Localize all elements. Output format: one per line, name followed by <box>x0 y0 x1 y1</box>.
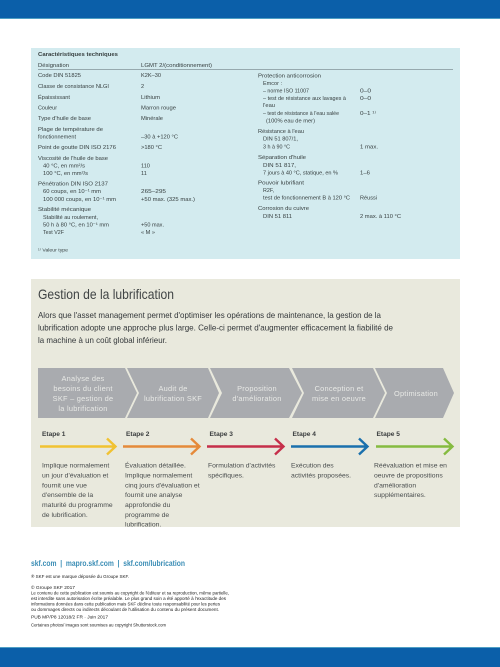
bottom blue band <box>0 647 500 667</box>
footer links: skf.com | mapro.skf.com | skf.com/lubrication <box>31 558 185 568</box>
step 2: Etape 2 <box>126 431 150 438</box>
step 2: approfondie du <box>125 502 171 509</box>
specifications right table: test de fonctionnement B à 120 °C <box>263 196 350 202</box>
specifications right table: Emcor : <box>263 81 282 87</box>
step 5: Réévaluation et mise en <box>374 462 447 470</box>
step 5: supplémentaires. <box>374 492 426 499</box>
specifications right table: 0–0 <box>360 96 371 102</box>
specifications left table: fonctionnement <box>38 134 76 140</box>
legal text: Le contenu de cette publication est soumis au copyright de l'éditeur et sa reproduction, même partielle, <box>31 590 229 596</box>
specifications left table: LGMT 2/(conditionnement) <box>141 63 212 69</box>
specifications left table: Type d'huile de base <box>38 116 91 122</box>
specifications left table: >180 °C <box>141 145 162 151</box>
specifications right table: – test de résistance à l'eau salée <box>263 111 339 117</box>
legal text: ® SKF est une marque déposée du Groupe SKF. <box>31 574 129 579</box>
step 1: Implique normalement <box>42 462 109 470</box>
specifications right table: Corrosion du cuivre <box>258 206 309 212</box>
step 1: d'ensemble de la <box>42 492 93 499</box>
step 5: d'amélioration <box>374 482 416 490</box>
specifications left table: +50 max. <box>141 222 164 228</box>
specifications right table: 1 max. <box>360 144 378 150</box>
specifications left table: « M » <box>141 230 155 236</box>
specifications left table: Épaississant <box>38 94 70 101</box>
specifications right table: – test de résistance aux lavages à <box>263 96 347 102</box>
step 3 <box>207 431 284 480</box>
step 5: Etape 5 <box>376 431 400 438</box>
step 3: Formulation d'activités <box>208 462 276 470</box>
management heading: Gestion de la lubrification <box>38 286 174 302</box>
step 2: fournit une analyse <box>125 492 183 499</box>
step 3: spécifiques. <box>208 472 244 480</box>
specifications left table: Lithium <box>141 95 160 101</box>
specifications left table: 2 <box>141 84 144 90</box>
specifications left table: K2K–30 <box>141 73 161 79</box>
chevron: design and implementation <box>292 368 385 418</box>
specifications left table: Stabilité mécanique <box>38 207 91 213</box>
specifications right table: Séparation d'huile <box>258 155 306 161</box>
chevron: client needs analysis: la lubrification <box>58 404 108 413</box>
arrow: orange <box>123 438 200 454</box>
step 2 <box>123 431 200 528</box>
specifications right table: (100% eau de mer) <box>266 118 315 124</box>
chevron: client needs analysis: besoins du client <box>53 384 113 393</box>
management introduction: la machine à un coût global inférieur. <box>38 336 167 345</box>
management introduction <box>38 311 393 345</box>
specifications left table: Test V2F <box>43 230 65 236</box>
arrow: red <box>207 438 284 454</box>
arrow: yellow <box>40 438 116 454</box>
management introduction: Alors que l'asset management permet d'optimiser les opérations de maintenance, la gestion de la <box>38 311 381 320</box>
step 1 <box>40 431 116 519</box>
specifications right table: DIN 51 811 <box>263 214 292 220</box>
chevron: improvement proposal: Proposition <box>237 384 277 393</box>
legal text: informations données dans cette publication mais SKF décline toute responsabilité pour les pertes <box>31 602 220 606</box>
specifications footnote: ¹⁾ Valeur type <box>38 248 69 252</box>
chevron: lubrication audit: lubrification SKF <box>144 394 202 403</box>
specifications right table: 2 max. à 110 °C <box>360 214 401 220</box>
specifications heading: Caractéristiques techniques <box>38 52 118 58</box>
specifications right table: 0–1 ¹⁾ <box>360 110 377 117</box>
specifications right table: 0–0 <box>360 88 371 94</box>
step 1: un jour d'évaluation et <box>42 472 108 480</box>
specifications right table: Résistance à l'eau <box>258 129 304 135</box>
chevron: client needs analysis: SKF – gestion de <box>53 394 113 403</box>
specifications right table: R2F, <box>263 188 274 194</box>
legal text <box>31 574 229 628</box>
chevron: optimisation: Optimisation <box>394 389 438 398</box>
specifications left table: 100 °C, en mm²/s <box>43 171 88 177</box>
panel: lubrication management <box>31 279 460 528</box>
specifications right table: 3 h à 90 °C <box>263 144 290 150</box>
legal text: est interdite sans autorisation écrite préalable. Le plus grand soin a été apporté à l'exactitude des <box>31 596 226 601</box>
legal text: PUB MP/P8 12018/2 FR · Juin 2017 <box>31 614 109 620</box>
specifications left table: Minérale <box>141 116 163 122</box>
specifications right table: 7 jours à 40 °C, statique, en % <box>263 170 338 176</box>
step 4: Exécution des <box>291 462 334 470</box>
step 4 <box>291 431 368 480</box>
specifications left table: 11 <box>141 171 147 177</box>
specifications right table: Réussi <box>360 196 377 202</box>
specifications left table: Code DIN 51825 <box>38 73 81 79</box>
specifications left table: 265–295 <box>141 189 166 195</box>
specifications left table <box>38 63 453 236</box>
panel: technical specifications <box>31 48 460 259</box>
legal text: Certaines photos/ images sont soumises au copyright Shutterstock.com <box>31 622 167 628</box>
step 2: programme de <box>125 512 169 519</box>
specifications left table: Classe de consistance NLGI <box>38 84 109 90</box>
specifications right table <box>258 74 401 220</box>
specifications left table: Plage de température de <box>38 127 103 133</box>
step 1: maturité du programme <box>42 502 113 509</box>
management introduction: lubrification adopte une approche plus large. Celle-ci permet d'augmenter efficacement la fiabilité de <box>38 324 393 332</box>
specifications right table: DIN 51 817, <box>263 163 296 169</box>
step 4: Etape 4 <box>292 431 316 438</box>
specifications right table: DIN 51 807/1, <box>263 136 298 142</box>
specifications left table: +50 max. (325 max.) <box>141 197 195 203</box>
specifications left table: Point de goutte DIN ISO 2176 <box>38 145 116 151</box>
specifications right table: 1–6 <box>360 170 370 176</box>
chevron: design and implementation: Conception et <box>315 384 363 393</box>
specifications left table: 60 coups, en 10⁻¹ mm <box>43 189 101 195</box>
chevron: lubrication audit: Audit de <box>158 384 188 393</box>
step 5: oeuvre de propositions <box>374 472 443 480</box>
specifications left table: –30 à +120 °C <box>141 134 178 140</box>
arrow: blue <box>291 438 368 454</box>
specifications right table: l'eau <box>263 103 275 109</box>
specifications left table: 110 <box>141 164 150 170</box>
chevron: client needs analysis: Analyse des <box>61 374 105 383</box>
specifications right table: Pouvoir lubrifiant <box>258 180 304 186</box>
chevron: design and implementation: mise en oeuvre <box>312 394 366 403</box>
specifications right table: – norme ISO 11007 <box>263 88 309 94</box>
step 3: Etape 3 <box>210 431 233 438</box>
chevron: optimisation <box>375 368 454 418</box>
specifications left table: Désignation <box>38 63 69 69</box>
legal text: ou dommages directs ou indirects découlant de l'utilisation du contenu du présent document. <box>31 607 219 612</box>
step 2: Implique normalement <box>125 472 192 480</box>
specifications right table: Protection anticorrosion <box>258 74 321 80</box>
specifications left table: Couleur <box>38 106 57 112</box>
legal text: © Groupe SKF 2017 <box>31 585 76 590</box>
top blue band <box>0 0 500 19</box>
process chevrons <box>38 368 454 418</box>
step 1: fournit une vue <box>42 482 87 490</box>
step 2: cinq jours d'évaluation et <box>125 482 200 490</box>
chevron: client needs analysis <box>38 368 137 418</box>
step 2: Évaluation détaillée. <box>125 460 186 470</box>
step 2: lubrification. <box>125 522 161 528</box>
arrow: green <box>376 438 452 454</box>
step 1: de lubrification. <box>42 512 88 519</box>
step 4: activités proposées. <box>291 472 351 480</box>
chevron: lubrication audit <box>127 368 219 418</box>
step 5 <box>374 431 452 499</box>
specifications left table: 40 °C, en mm²/s <box>43 164 85 170</box>
specifications left table: 50 h à 80 °C, en 10⁻¹ mm <box>43 222 109 228</box>
specifications left table: 100 000 coups, en 10⁻¹ mm <box>43 197 116 203</box>
specifications left table: Marron rouge <box>141 106 176 112</box>
chevron: improvement proposal <box>210 368 302 418</box>
chevron: improvement proposal: d'amélioration <box>232 394 282 403</box>
specifications left table: Pénétration DIN ISO 2137 <box>38 182 108 188</box>
specifications left table: Viscosité de l'huile de base <box>38 156 108 162</box>
specifications left table: Stabilité au roulement, <box>43 215 98 221</box>
step 1: Etape 1 <box>42 431 66 438</box>
